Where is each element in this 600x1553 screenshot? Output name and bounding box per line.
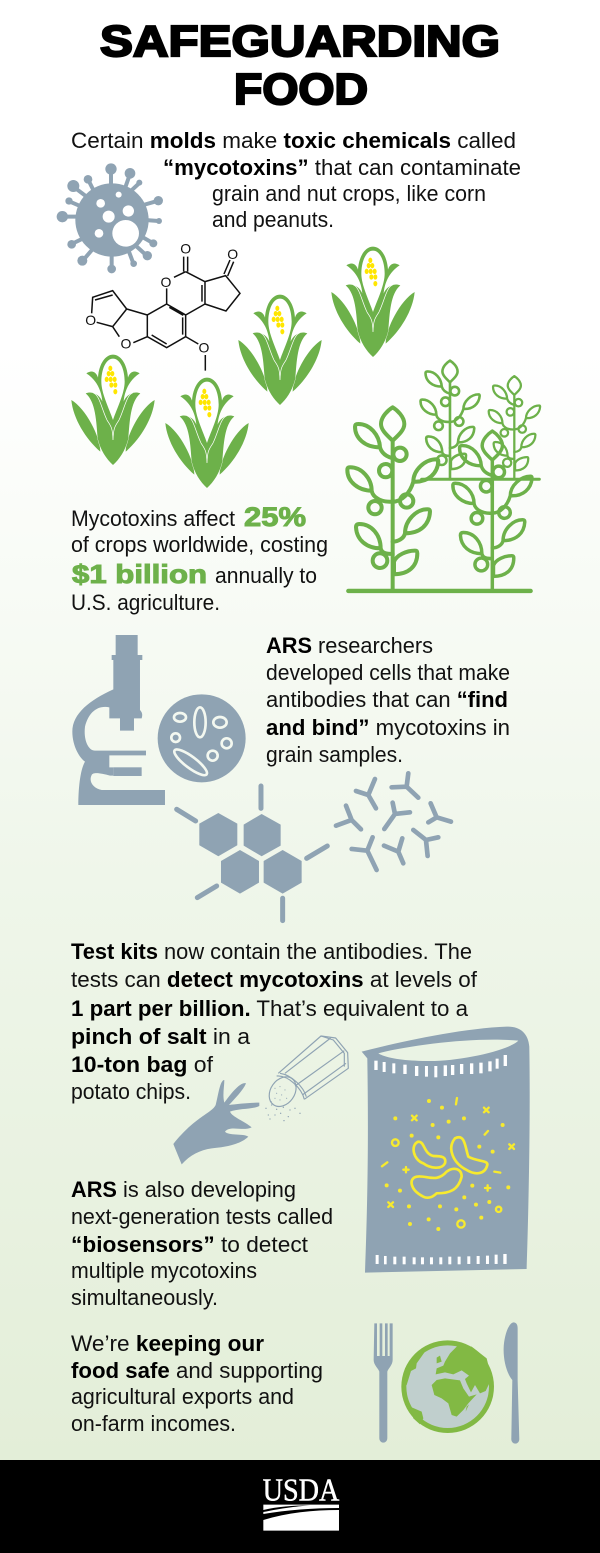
chemical structure: aflatoxin <box>85 240 240 371</box>
icon: corn 2 <box>165 378 249 488</box>
research text: and bind” mycotoxins in <box>266 715 510 740</box>
chemical structure: aflatoxin: O <box>85 312 96 328</box>
test kit text: tests can detect mycotoxins at levels of <box>71 967 478 992</box>
closing text: on-farm incomes. <box>71 1411 236 1436</box>
icon: fork <box>374 1323 393 1443</box>
test kit text: Test kits now contain the antibodies. The <box>71 939 472 964</box>
icon: globe plate <box>401 1340 494 1433</box>
biosensors text: next-generation tests called <box>71 1204 333 1229</box>
icon: corn 4 <box>331 247 415 357</box>
chemical structure: aflatoxin: O <box>199 340 210 356</box>
icon: magnified sample <box>158 694 246 782</box>
closing text <box>71 1331 323 1436</box>
closing text: We’re keeping our <box>71 1331 264 1356</box>
test kit text <box>71 939 478 1104</box>
crop statistics text: U.S. agriculture. <box>71 590 220 615</box>
test kit text: 10-ton bag of <box>71 1052 214 1077</box>
USDA logo: USDA <box>263 1472 339 1508</box>
crop statistics text: of crops worldwide, costing <box>71 532 328 557</box>
research text <box>266 633 510 767</box>
chemical structure: aflatoxin: O <box>121 336 132 352</box>
biosensors text: multiple mycotoxins <box>71 1258 257 1283</box>
chemical structure: aflatoxin: O <box>161 274 172 290</box>
chemical structure: aflatoxin: O <box>227 246 238 262</box>
USDA logo <box>263 1472 339 1531</box>
biosensors text <box>71 1177 333 1310</box>
biosensors text: ARS is also developing <box>71 1177 296 1202</box>
icon: molecule hexagons <box>177 786 327 921</box>
title <box>100 17 500 114</box>
title: FOOD <box>234 65 368 114</box>
icon: knife <box>504 1322 519 1444</box>
icon: antibodies <box>336 773 451 870</box>
closing text: food safe and supporting <box>71 1358 323 1383</box>
footer bar <box>0 1460 600 1553</box>
test kit text: pinch of salt in a <box>71 1024 251 1049</box>
crop statistics text: $1 billion <box>72 559 207 589</box>
intro text: grain and nut crops, like corn <box>212 181 486 206</box>
icon: corn 1 <box>71 355 155 465</box>
icon: chip bag <box>362 1027 530 1273</box>
intro text: and peanuts. <box>212 207 334 232</box>
icon: mold spore <box>57 163 163 273</box>
biosensors text: “biosensors” to detect <box>71 1232 308 1257</box>
research text: ARS researchers <box>266 633 433 658</box>
biosensors text: simultaneously. <box>71 1285 218 1310</box>
intro text: Certain molds make toxic chemicals called <box>71 128 516 153</box>
icon: microscope <box>72 635 165 805</box>
test kit text: potato chips. <box>71 1079 191 1104</box>
icon: hand <box>173 1080 259 1164</box>
test kit text: 1 part per billion. That’s equivalent to a <box>71 996 469 1021</box>
research text: grain samples. <box>266 742 403 767</box>
intro text: “mycotoxins” that can contaminate <box>163 155 521 180</box>
closing text: agricultural exports and <box>71 1384 294 1409</box>
crop statistics text <box>71 502 328 615</box>
crop statistics text: Mycotoxins affect <box>71 506 235 531</box>
intro text <box>71 128 521 232</box>
research text: antibodies that can “find <box>266 687 508 712</box>
icon: corn 3 <box>238 295 322 405</box>
crop statistics text: annually to <box>215 563 317 588</box>
research text: developed cells that make <box>266 660 510 685</box>
icon: salt shaker <box>264 1036 348 1121</box>
crop statistics text: 25% <box>244 502 306 532</box>
chemical structure: aflatoxin: O <box>180 240 191 256</box>
title: SAFEGUARDING <box>100 17 500 66</box>
icon: crop plants <box>347 361 540 591</box>
